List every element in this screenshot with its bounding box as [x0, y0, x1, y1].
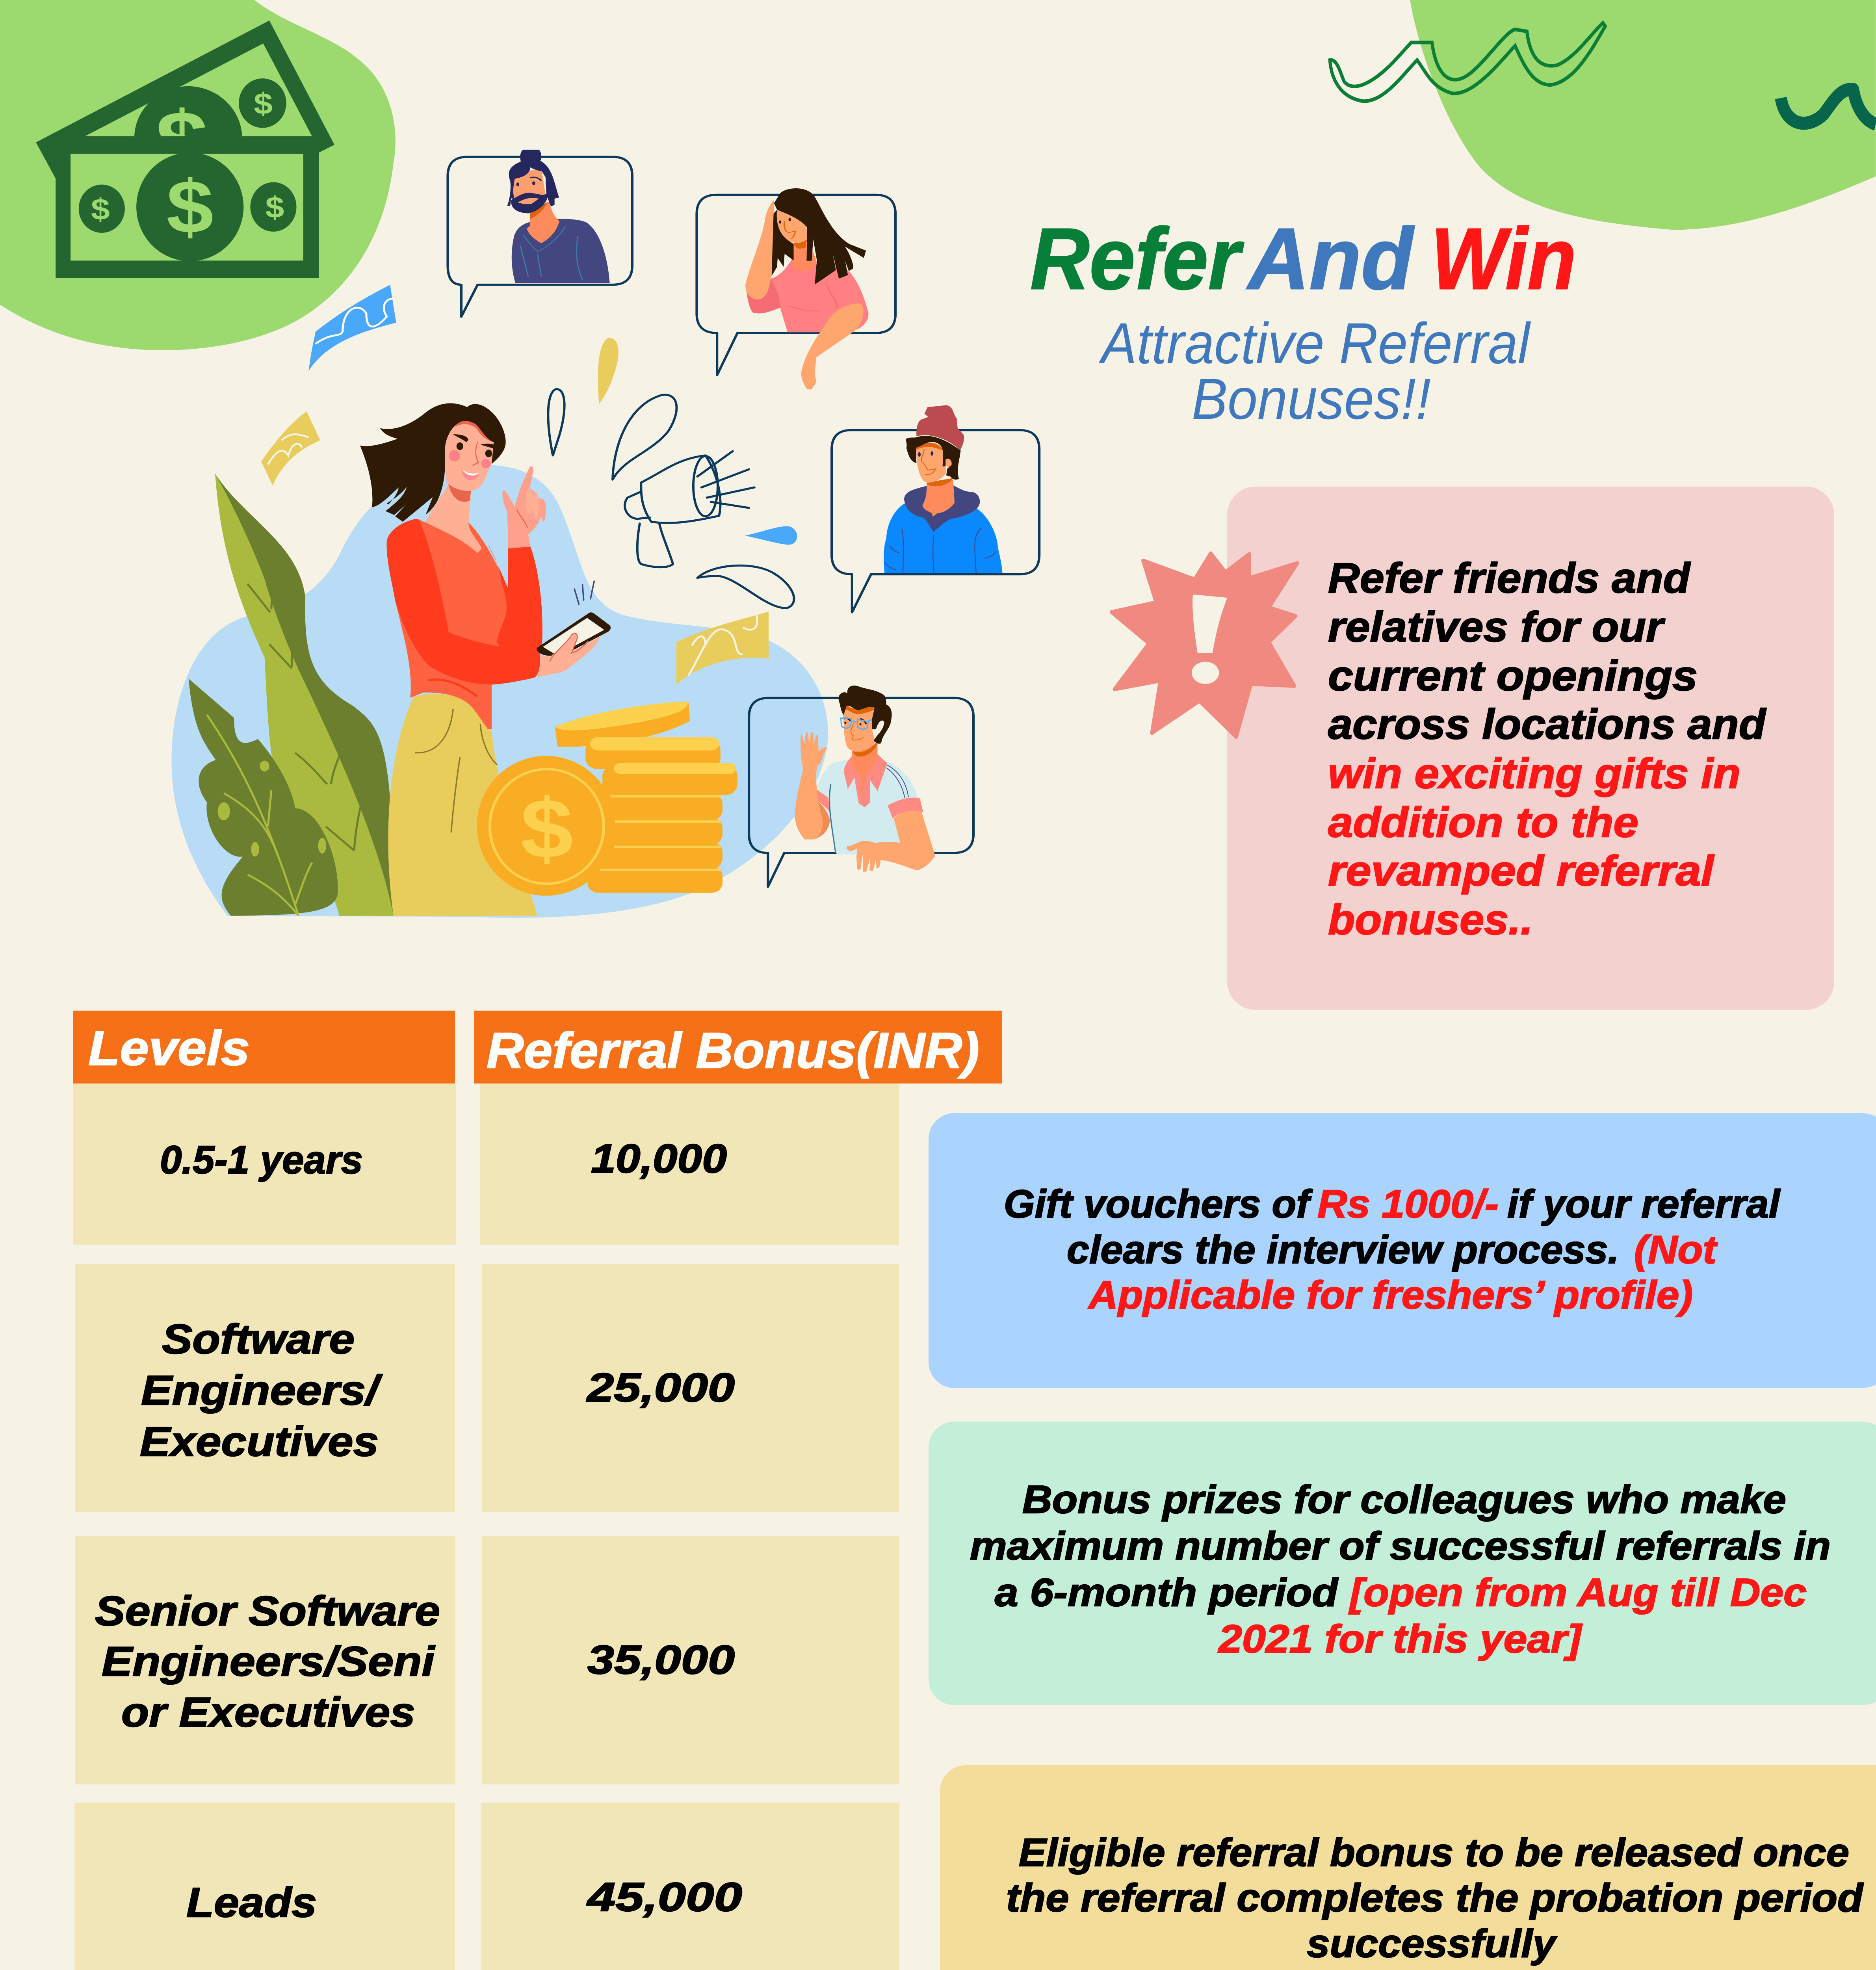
icon: money bills [36, 20, 334, 278]
row: 0.5-1 years: 10,000 [591, 1136, 727, 1181]
illustration: referral scene with money, woman and speech bubbles [0, 0, 1039, 918]
row: senior software engineers: or Executives [121, 1689, 415, 1736]
long-haired woman [745, 188, 868, 389]
row: leads [74, 1803, 899, 1970]
row: leads: Leads [186, 1879, 317, 1926]
title [1030, 210, 1576, 307]
panel: eligibility: Eligible referral bonus to be released once [1019, 1831, 1849, 1875]
header: levels: Levels [88, 1021, 250, 1076]
panel: gift vouchers: Applicable for freshers’ profile) [1087, 1273, 1693, 1317]
person: bearded man and long-haired woman [507, 150, 868, 389]
bubble 4 outline [749, 698, 973, 887]
neck [425, 484, 481, 553]
panel: bonus prizes: [open from Aug till Dec [1348, 1570, 1807, 1615]
green blob top left [0, 0, 396, 350]
subtitle [1098, 311, 1531, 431]
blue background blob [171, 465, 828, 918]
row: senior software engineers: 35,000 [587, 1637, 735, 1682]
hem line [429, 680, 477, 696]
panel: eligibility: successfully [1307, 1922, 1558, 1966]
squiggle dark [1781, 89, 1876, 124]
phone ticks [574, 581, 594, 604]
drop: blue [745, 526, 797, 545]
bubble 3 outline [832, 430, 1039, 612]
row: senior software engineers: Engineers/Seni [102, 1638, 436, 1685]
row: 0.5-1 years: 0.5-1 years [160, 1138, 363, 1182]
row: software engineers: Executives [140, 1418, 379, 1465]
coin stack [555, 702, 737, 893]
panel text: relatives for our [1328, 603, 1665, 650]
bubble 1 outline [448, 157, 632, 317]
table: levels and referral bonus [73, 1011, 1002, 1970]
raised hand [502, 466, 546, 548]
row: software engineers [75, 1264, 899, 1512]
panel text: current openings [1328, 652, 1698, 699]
panel text: across locations and [1328, 700, 1766, 748]
sleeves [387, 519, 542, 685]
icon: money bills: $ [166, 165, 214, 249]
big coin: $ [520, 782, 573, 876]
drop: yellow [598, 338, 619, 404]
icon: exclamation star [1112, 553, 1297, 737]
phone [537, 612, 611, 656]
drop: outline wide [697, 565, 794, 608]
top [387, 519, 542, 729]
top right decoration [1330, 0, 1876, 230]
floating paper: yellow right [676, 611, 769, 685]
panel text: win exciting gifts in [1328, 749, 1740, 797]
panel: gift vouchers: if your referral [1507, 1182, 1781, 1226]
panel: bonus prizes: 2021 for this year] [1218, 1617, 1583, 1661]
drop: outline small [548, 389, 565, 455]
row: software engineers: Software [162, 1316, 355, 1362]
subtitle: Attractive Referral [1098, 311, 1531, 376]
panel: gift vouchers: Rs 1000/- [1317, 1182, 1499, 1226]
drop: outline large [613, 395, 676, 479]
floating paper: blue [309, 285, 396, 371]
panel: eligibility: the referral completes the probation period [1006, 1876, 1864, 1920]
panel: gift vouchers: Gift vouchers of [1004, 1182, 1313, 1226]
big coin [477, 756, 615, 896]
panel: bonus prizes: a 6-month period [995, 1570, 1339, 1615]
header: referral bonus: Referral Bonus(INR) [487, 1022, 979, 1079]
row: senior software engineers: Senior Software [95, 1588, 440, 1634]
row: software engineers: 25,000 [586, 1365, 735, 1410]
row: 0.5-1 years [73, 1084, 899, 1245]
holding hand [537, 634, 600, 677]
panel: bonus prizes: Bonus prizes for colleagues who make [1022, 1478, 1786, 1522]
bearded man [507, 150, 610, 283]
hair [360, 403, 506, 522]
panel text [1328, 554, 1766, 943]
person: man with glasses waving [795, 686, 935, 872]
face [445, 421, 494, 502]
icon: money bills: $ [254, 87, 273, 121]
panel text: Refer friends and [1328, 554, 1691, 602]
panel text: bonuses.. [1328, 896, 1533, 943]
panel: bonus prizes [929, 1422, 1876, 1705]
icon: megaphone [625, 451, 754, 567]
woman figure [360, 403, 611, 729]
green blob top right [1410, 0, 1876, 230]
row: software engineers: Engineers/ [141, 1367, 383, 1414]
row: leads: 45,000 [587, 1874, 742, 1920]
title: Refer [1030, 210, 1244, 307]
header: levels [73, 1011, 455, 1084]
icon: money bills: $ [155, 94, 208, 188]
panel text: addition to the [1328, 798, 1638, 846]
panel text: revamped referral [1328, 847, 1714, 894]
floating paper: yellow left [261, 411, 320, 485]
panel: refer friends [1112, 487, 1834, 1010]
panel: gift vouchers: clears the interview process. [1067, 1228, 1619, 1272]
row: senior software engineers [75, 1536, 899, 1784]
panel: bonus prizes: maximum number of successful referrals in [970, 1524, 1831, 1568]
title: Win [1431, 210, 1576, 307]
person: man in red hat [884, 405, 1002, 573]
panel: eligibility [940, 1765, 1876, 1970]
subtitle: Bonuses!! [1192, 367, 1431, 431]
bubble 2 outline [697, 195, 895, 375]
icon: money bills: $ [265, 191, 284, 225]
icon: money bills: $ [91, 193, 110, 226]
woman pants [388, 694, 537, 916]
panel: gift vouchers [929, 1113, 1876, 1388]
squiggle outline [1330, 23, 1605, 101]
title: And [1246, 210, 1415, 307]
plant leaves [189, 474, 394, 916]
panel: gift vouchers: (Not [1634, 1228, 1718, 1272]
